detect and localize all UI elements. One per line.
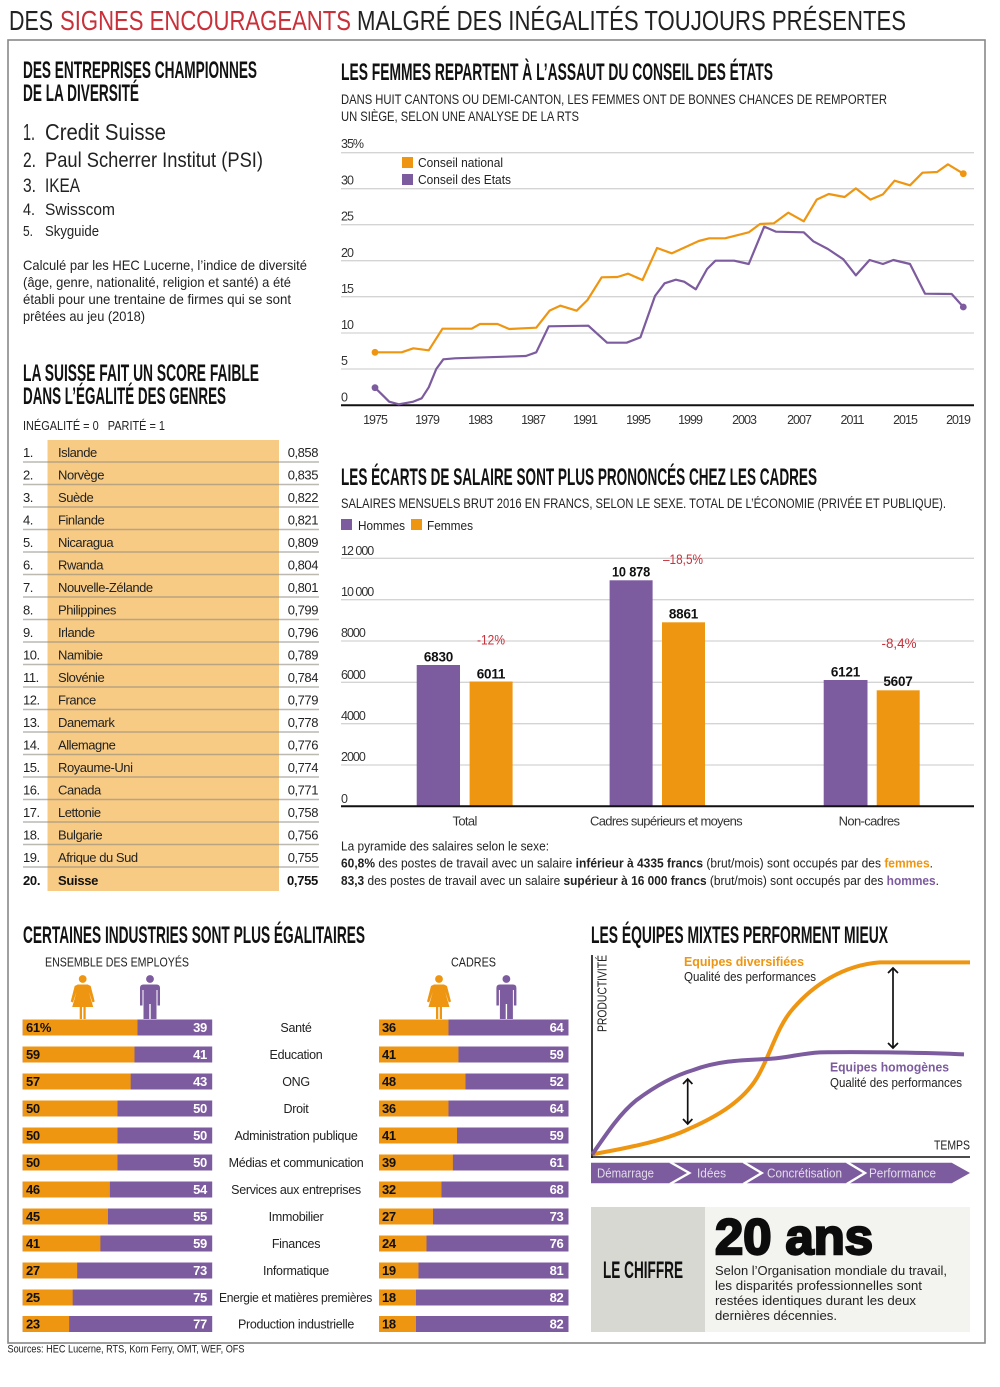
bars: Non-cadres [824, 635, 920, 828]
ranking table: Slovénie [58, 670, 104, 685]
methodology note: (âge, genre, nationalité, religion et santé) a été [23, 274, 291, 290]
methodology note: Calculé par les HEC Lucerne, l’indice de diversité [23, 257, 307, 273]
ranked company list: 1. [23, 119, 35, 145]
ranking table: 5. [23, 535, 33, 550]
ranked company list: Swisscom [45, 201, 115, 219]
stacked bars: managers: 68 [550, 1182, 564, 1197]
line chart: 25 [341, 210, 354, 224]
line chart: 1975 [363, 413, 388, 427]
line chart: 1979 [415, 413, 440, 427]
ranking table: 13. [23, 715, 40, 730]
stacked bars: all employees: 43 [193, 1074, 207, 1089]
industry labels: Droit [284, 1102, 309, 1116]
subheading: analysis: DANS HUIT CANTONS OU DEMI-CANTON, LES FEMMES ONT DE BONNES CHANCES DE REMPORTER [341, 92, 887, 107]
legend: Conseil national [418, 155, 503, 170]
ranking table: Nouvelle-Zélande [58, 580, 153, 595]
icon: man left [140, 975, 160, 1019]
stacked bars: managers: 61 [550, 1155, 564, 1170]
ranking table: 0,778 [288, 715, 318, 730]
ranking table: 0,801 [288, 580, 318, 595]
label: homogeneous teams [830, 1060, 962, 1090]
ranking table: 15. [23, 760, 40, 775]
ranking table: 0,779 [288, 692, 318, 708]
salary pyramid note: 60,8% des postes de travail avec un salaire inférieur à 4335 francs (brut/mois) sont occupés par des femmes. [341, 856, 933, 870]
column label: managers: CADRES [451, 954, 496, 970]
stacked bars: all employees [23, 1020, 212, 1332]
ranking table: 17. [23, 805, 40, 820]
icon: woman right [427, 975, 451, 1019]
ranked company list [23, 119, 263, 240]
ranking table: 0,784 [288, 670, 318, 685]
stacked bars: managers: 27 [382, 1209, 396, 1224]
ranking table: Finlande [58, 512, 104, 528]
process arrow band: Démarrage [597, 1166, 654, 1181]
stacked bars: all employees: 50 [193, 1155, 207, 1170]
line chart: 2007 [787, 413, 812, 427]
heading: champions: DE LA DIVERSITÉ [23, 79, 139, 107]
label: diverse teams: Equipes diversifiées [684, 954, 804, 969]
stacked bars: managers: 59 [550, 1047, 564, 1062]
ranked company list: Credit Suisse [45, 119, 166, 145]
industry labels: Immobilier [269, 1210, 323, 1224]
ranking table: Lettonie [58, 805, 101, 820]
salary pyramid note: 83,3 des postes de travail avec un salaire supérieur à 16 000 francs (brut/mois) sont occupés par des hommes. [341, 874, 939, 888]
curve: homogeneous teams [592, 1052, 964, 1154]
ranking table: 2. [23, 468, 33, 482]
stacked bars: managers: 52 [550, 1074, 564, 1089]
key figure explanation: les disparités professionnelles sont [715, 1278, 922, 1293]
stacked bars: all employees: 59 [26, 1047, 40, 1062]
curve chart: PRODUCTIVITÉ [594, 955, 610, 1032]
legend [341, 518, 473, 533]
panel: salary gaps bar chart [341, 463, 974, 888]
legend [402, 155, 511, 187]
ranked company list: IKEA [45, 176, 80, 197]
stacked bars: all employees: 39 [193, 1020, 207, 1035]
stacked bars: managers: 32 [382, 1182, 396, 1197]
ranking table: 3. [23, 490, 33, 505]
ranked company list: Skyguide [45, 224, 99, 240]
stacked bars: all employees: 55 [193, 1209, 207, 1224]
stacked bars: managers: 82 [550, 1290, 564, 1305]
bars: Cadres supérieurs et moyens: –18,5% [663, 551, 703, 567]
bars: Cadres supérieurs et moyens: Cadres supérieurs et moyens [590, 814, 743, 828]
stacked bars: all employees: 75 [193, 1290, 207, 1305]
ranking table: 16. [23, 782, 40, 798]
stacked bars: all employees: 59 [193, 1236, 207, 1251]
ranking table: 9. [23, 625, 33, 640]
key figure explanation [715, 1263, 947, 1323]
bar chart: 0 [341, 792, 348, 806]
series: Conseil national [372, 164, 967, 356]
line chart: 5 [341, 354, 348, 368]
heading: ranking [23, 360, 259, 410]
curve chart [591, 954, 970, 1158]
stacked bars: managers: 73 [550, 1209, 564, 1224]
line chart [341, 137, 974, 427]
curve: diverse teams [592, 962, 970, 1154]
ranking table: 0,858 [288, 445, 318, 460]
bars: Non-cadres: 6121 [831, 664, 861, 680]
stacked bars: all employees: 41 [26, 1236, 40, 1251]
methodology note [23, 257, 307, 324]
column label: all employees: ENSEMBLE DES EMPLOYÉS [45, 954, 189, 970]
stacked bars: managers: 48 [382, 1074, 396, 1089]
ranked company list: 4. [23, 201, 35, 219]
stacked bars: all employees: 61% [26, 1020, 52, 1035]
ranking table: 0,822 [288, 490, 318, 505]
key figure explanation: Selon l’Organisation mondiale du travail, [715, 1263, 947, 1278]
bars: Cadres supérieurs et moyens: 10 878 [612, 564, 651, 580]
stacked bars: all employees: 54 [193, 1182, 208, 1197]
industry labels: Finances [272, 1237, 320, 1251]
stacked bars: managers: 19 [382, 1263, 396, 1278]
ranking table: Nicaragua [58, 535, 114, 550]
stacked bars: managers [379, 1020, 568, 1332]
stacked bars: all employees: 50 [26, 1155, 40, 1170]
bars: Total [417, 632, 513, 828]
bar chart: 10 000 [341, 585, 374, 599]
bars: Total: 6011 [477, 666, 506, 682]
subheading: analysis: UN SIÈGE, SELON UNE ANALYSE DE LA RTS [341, 109, 579, 124]
bar chart: 4000 [341, 709, 366, 723]
line chart: 1991 [573, 413, 598, 427]
ranking table: 10. [23, 648, 40, 662]
ranking table: 0,776 [288, 738, 318, 752]
stacked bars: managers: 81 [550, 1263, 564, 1278]
heading: ranking: LA SUISSE FAIT UN SCORE FAIBLE [23, 360, 259, 387]
key figure explanation: restées identiques durant les deux [715, 1293, 917, 1308]
industry labels: Médias et communication [229, 1156, 364, 1170]
ranking table: Philippines [58, 602, 117, 618]
ranking table: 4. [23, 512, 33, 528]
bar chart: 12 000 [341, 544, 374, 558]
series: Conseil des Etats [372, 227, 967, 404]
main title: SIGNES ENCOURAGEANTS [60, 5, 351, 36]
industry labels: Education [270, 1048, 323, 1062]
subheading: analysis [341, 92, 887, 124]
stacked bars: managers: 24 [382, 1236, 397, 1251]
line chart: 2015 [893, 413, 918, 427]
ranked company list: 2. [23, 149, 36, 172]
ranking table [23, 440, 319, 891]
industry labels: ONG [282, 1075, 310, 1089]
line chart: 1995 [626, 413, 651, 427]
main title: DES [9, 5, 53, 36]
stacked bars: all employees: 50 [193, 1128, 207, 1143]
scale note: INÉGALITÉ = 0 PARITÉ = 1 [23, 418, 165, 433]
ranking table: Bulgarie [58, 828, 102, 842]
stacked bars: managers: 41 [382, 1128, 396, 1143]
ranking table: Norvège [58, 468, 104, 482]
ranking table: 6. [23, 558, 33, 572]
sources: Sources: HEC Lucerne, RTS, Korn Ferry, OMT, WEF, OFS [8, 1344, 244, 1356]
ranking table: Danemark [58, 715, 115, 730]
process arrow band: Performance [869, 1166, 936, 1181]
heading: champions [23, 57, 257, 107]
key figure explanation: dernières décennies. [715, 1308, 837, 1323]
stacked bars: all employees: 73 [193, 1263, 207, 1278]
stacked bars: all employees: 77 [193, 1316, 207, 1332]
ranked company list: 3. [23, 176, 36, 197]
ranked company list: 5. [23, 224, 33, 240]
panel: Conseil des États line chart [341, 58, 974, 427]
methodology note: établi pour une trentaine de firmes qui se sont [23, 291, 291, 307]
ranking table: Rwanda [58, 558, 104, 572]
bars: Non-cadres: Non-cadres [839, 814, 900, 828]
ranking table: 0,755 [288, 850, 318, 865]
main title [9, 5, 906, 36]
salary pyramid note: La pyramide des salaires selon le sexe: [341, 840, 549, 854]
bars: Non-cadres: 5607 [883, 674, 913, 689]
stacked bars: managers: 64 [550, 1101, 565, 1116]
ranking table: 18. [23, 828, 40, 842]
ranking table: Suisse [58, 873, 98, 888]
industry labels: Informatique [263, 1264, 329, 1278]
arrow: late gap [888, 968, 898, 1048]
stacked bars: all employees: 45 [26, 1209, 40, 1224]
ranking table: 0,835 [288, 468, 318, 482]
stacked bars: all employees: 57 [26, 1074, 40, 1089]
line chart: 20 [341, 246, 354, 260]
ranking table: 0,809 [288, 535, 318, 550]
ranking table: 20. [23, 873, 40, 888]
line chart: 2003 [732, 413, 757, 427]
stacked bars: all employees: 25 [26, 1290, 40, 1305]
ranking table: 7. [23, 580, 33, 595]
arrow: early gap [683, 1079, 692, 1124]
line chart: 1999 [678, 413, 703, 427]
icon: man right [496, 975, 516, 1019]
ranking table: Suède [58, 490, 94, 505]
ranking table: Afrique du Sud [58, 850, 138, 865]
icon: woman left [71, 975, 95, 1019]
bars: Total: Total [452, 814, 477, 828]
ranking table: 0,799 [288, 602, 318, 618]
bars: Total: -12% [477, 632, 505, 648]
stacked bars: managers: 18 [382, 1316, 396, 1332]
ranking table: Allemagne [58, 738, 116, 752]
stacked bars: all employees: 50 [26, 1101, 40, 1116]
label: homogeneous teams: Equipes homogènes [830, 1060, 949, 1074]
process arrow band: Concrétisation [767, 1166, 842, 1181]
stacked bars: managers: 76 [550, 1236, 564, 1251]
salary pyramid note [341, 840, 939, 888]
curve chart: TEMPS [934, 1138, 970, 1152]
ranking table: 1. [23, 445, 33, 460]
ranking table: 0,774 [288, 760, 318, 775]
line chart: 2011 [841, 413, 864, 427]
ranking table: 14. [23, 738, 40, 752]
ranking table: 11. [23, 670, 39, 685]
bars: Total: 6830 [424, 650, 453, 664]
stacked bars: managers: 59 [550, 1128, 564, 1143]
bar chart [341, 544, 974, 828]
industry labels [219, 1021, 372, 1332]
process arrow band: Idées [697, 1166, 726, 1181]
ranking table: 0,796 [288, 625, 318, 640]
line chart: 1983 [468, 413, 493, 427]
legend: Femmes [427, 518, 473, 533]
ranking table: 0,755 [287, 873, 318, 888]
bar chart: 8000 [341, 626, 366, 640]
panel: diversity champions [23, 57, 307, 324]
line chart: 1987 [521, 413, 546, 427]
ranking table: 19. [23, 850, 40, 865]
stacked bars: all employees: 50 [193, 1101, 207, 1116]
stacked bars: managers: 41 [382, 1047, 396, 1062]
line chart: 15 [341, 282, 354, 296]
stacked bars: managers: 18 [382, 1290, 396, 1305]
ranking table: Irlande [58, 625, 95, 640]
label: le chiffre: LE CHIFFRE [603, 1257, 683, 1284]
line chart: 0 [341, 390, 348, 404]
ranking table: Canada [58, 782, 102, 798]
line chart: 10 [341, 318, 354, 332]
ranking table: 0,821 [288, 512, 318, 528]
bar chart: 2000 [341, 750, 366, 764]
bars: Non-cadres: -8,4% [882, 635, 916, 651]
big number: 20 ans [715, 1209, 873, 1265]
industry labels: Santé [280, 1021, 312, 1035]
bars: Cadres supérieurs et moyens [590, 551, 743, 828]
stacked bars: all employees: 50 [26, 1128, 40, 1143]
stacked bars: all employees: 41 [193, 1047, 207, 1062]
panel: gender equality ranking [23, 360, 319, 891]
panel: industries [23, 921, 568, 1332]
heading: champions: DES ENTREPRISES CHAMPIONNES [23, 57, 257, 84]
label: homogeneous teams: Qualité des performances [830, 1075, 962, 1090]
heading: industries: CERTAINES INDUSTRIES SONT PLUS ÉGALITAIRES [23, 921, 365, 949]
ranked company list: Paul Scherrer Institut (PSI) [45, 149, 263, 172]
ranking table: 0,771 [288, 782, 318, 798]
process arrow band [591, 1162, 970, 1184]
legend: Hommes [358, 518, 405, 533]
panel: mixed teams performance [591, 921, 970, 1184]
ranking table: 0,756 [288, 828, 318, 842]
stacked bars: managers: 39 [382, 1155, 396, 1170]
ranking table: France [58, 692, 96, 708]
industry labels: Administration publique [234, 1129, 358, 1143]
ranking table: Namibie [58, 648, 103, 662]
panel: key figure [591, 1207, 970, 1332]
label: diverse teams: Qualité des performances [684, 969, 816, 984]
line chart: 2019 [946, 413, 971, 427]
stacked bars: managers: 36 [382, 1020, 396, 1035]
ranking table: 0,758 [288, 805, 318, 820]
bar chart: 6000 [341, 668, 366, 682]
ranking table: 0,804 [288, 558, 318, 572]
stacked bars: all employees: 27 [26, 1263, 40, 1278]
label: diverse teams [684, 954, 816, 984]
line chart: 35% [341, 137, 364, 151]
industry labels: Energie et matières premières [219, 1291, 372, 1305]
ranking table: 8. [23, 602, 33, 618]
industry labels: Production industrielle [238, 1318, 354, 1332]
methodology note: prêtées au jeu (2018) [23, 308, 145, 324]
stacked bars: managers: 64 [550, 1020, 565, 1035]
ranking table: Islande [58, 445, 97, 460]
stacked bars: all employees: 46 [26, 1182, 40, 1197]
ranking table: 0,789 [288, 648, 318, 662]
bars: Cadres supérieurs et moyens: 8861 [669, 606, 699, 622]
line chart: 30 [341, 174, 354, 188]
industry labels: Services aux entreprises [231, 1183, 361, 1197]
stacked bars: all employees: 23 [26, 1316, 40, 1332]
stacked bars: managers: 82 [550, 1316, 564, 1332]
stacked bars: managers: 36 [382, 1101, 396, 1116]
legend: Conseil des Etats [418, 172, 511, 187]
ranking table: Royaume-Uni [58, 760, 133, 775]
heading: ranking: DANS L’ÉGALITÉ DES GENRES [23, 382, 226, 410]
ranking table: 12. [23, 692, 40, 708]
